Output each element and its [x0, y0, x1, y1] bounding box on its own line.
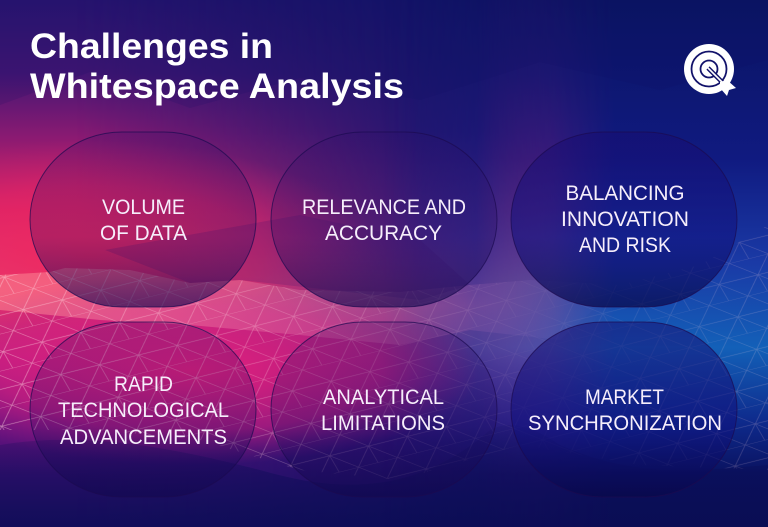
panel: market synchronization [511, 322, 737, 497]
panel: analytical limitations: LIMITATIONS [321, 412, 445, 435]
panel: balancing innovation and risk: AND RISK [579, 234, 671, 257]
panel: rapid technological advancements: RAPID [114, 373, 173, 396]
panel: market synchronization: SYNCHRONIZATION [528, 412, 722, 435]
panel: relevance and accuracy: RELEVANCE AND [302, 196, 466, 219]
panel: balancing innovation and risk: BALANCING [566, 182, 684, 205]
lower dark wave [0, 425, 768, 527]
panel: relevance and accuracy: ACCURACY [325, 222, 442, 245]
icon: target with arrow [684, 44, 736, 96]
panel: market synchronization: MARKET [585, 386, 664, 409]
title: Whitespace Analysis [30, 67, 404, 106]
panel: balancing innovation and risk: INNOVATION [561, 208, 689, 231]
panel: volume of data: OF DATA [100, 222, 187, 245]
triangular mesh network [0, 227, 768, 479]
panel: rapid technological advancements: TECHNOLOGICAL [58, 399, 229, 422]
panel: volume of data: VOLUME [102, 196, 185, 219]
background wave shapes [0, 0, 768, 345]
title [30, 27, 404, 106]
panel: analytical limitations [271, 322, 497, 497]
panel: balancing innovation and risk [511, 132, 737, 307]
panel: rapid technological advancements: ADVANCEMENTS [60, 426, 227, 449]
panel: volume of data [30, 132, 256, 307]
panel: rapid technological advancements [30, 322, 256, 497]
title: Challenges in [30, 27, 273, 66]
panel: relevance and accuracy [271, 132, 497, 307]
panel: analytical limitations: ANALYTICAL [323, 386, 444, 409]
